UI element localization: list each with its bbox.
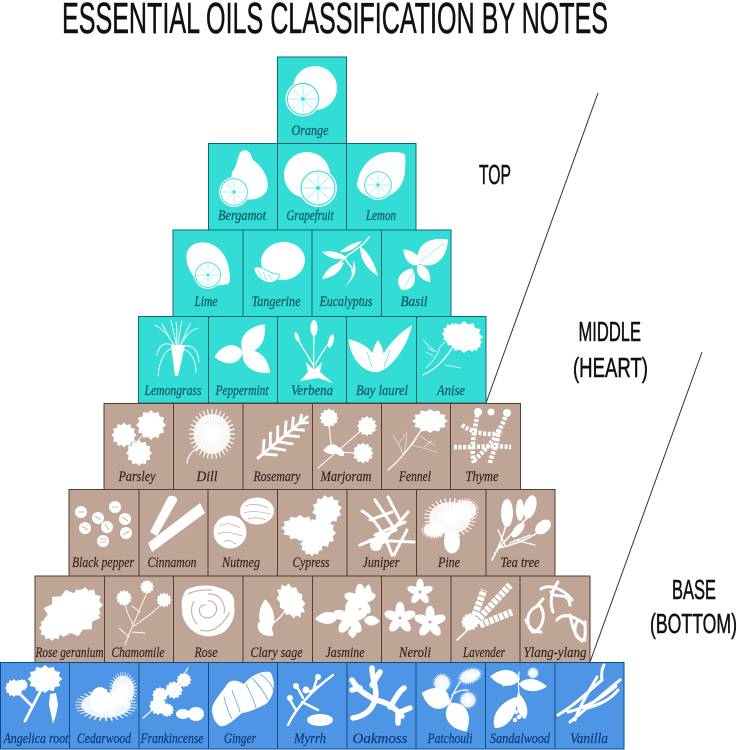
icon: parsley [112,410,166,466]
icon: basil [395,231,455,293]
cell: Lemongrass [138,316,208,403]
icon: black pepper [75,501,132,547]
label: Pine: Pine [437,555,460,571]
cell: Black pepper [69,490,139,576]
cell: Ylang-ylang [520,576,590,662]
icon: lavender [457,585,512,640]
icon: peppermint [213,318,276,380]
icon: juniper [360,497,414,555]
icon: lemon [357,152,405,200]
cell: Pine [416,490,486,576]
cell: Rose [174,576,243,662]
icon: clary sage [254,578,312,640]
icon: jasmine [315,584,380,638]
icon: oakmoss [352,668,410,723]
label: Nutmeg: Nutmeg [221,555,260,571]
label: Angelica root: Angelica root [3,731,69,747]
cell: Juniper [347,490,416,576]
icon: cypress [281,491,346,556]
heading: top: TOP [479,159,511,190]
icon: fennel [388,409,448,470]
label: Bay laurel: Bay laurel [356,383,408,399]
tier divider: middle to base [590,352,702,662]
icon: pine [421,498,479,554]
cell: Jasmine [312,576,382,662]
cell: Orange [278,57,346,144]
cell: Lemon [346,144,416,230]
cell: Cedarwood [70,662,139,749]
cell: Myrrh [278,662,347,749]
panel: top notes [138,57,486,403]
heading: middle (heart): MIDDLE [578,316,641,347]
panel: base notes [0,662,624,749]
icon: tea tree [492,494,554,560]
icon: ylang-ylang [526,582,585,641]
icon: grapefruit [284,152,337,207]
label: Patchouli: Patchouli [427,731,472,747]
label: Jasmine: Jasmine [326,645,365,661]
icon: sandalwood [488,667,547,733]
cell: Cinnamon [139,490,208,576]
icon: vanilla [558,665,620,722]
icon: verbena [293,320,335,383]
label: Lime: Lime [194,294,218,310]
icon: eucalyptus [322,237,378,292]
label: Parsley: Parsley [118,469,156,485]
cell: Peppermint [208,316,278,403]
icon: nutmeg [214,498,274,548]
cell: Clary sage [243,576,312,662]
heading: middle (heart): (HEART) [573,352,648,383]
label: Rose geranium: Rose geranium [35,645,104,661]
label: Tea tree: Tea tree [500,555,540,571]
cell: Rosemary [243,404,314,490]
label: Bergamot: Bergamot [218,208,267,224]
icon: dill [187,409,235,463]
label: Oakmoss: Oakmoss [352,731,408,747]
cell: Marjoram [312,404,382,490]
label: Rosemary: Rosemary [253,469,301,485]
cell: Lime [173,230,243,316]
cell: Sandalwood [486,662,555,749]
icon: bay laurel [342,321,417,378]
icon: rose [182,586,235,636]
cell: Verbena [278,316,346,403]
label: Peppermint: Peppermint [215,383,269,399]
label: Tangerine: Tangerine [252,294,301,310]
panel: middle notes [35,404,590,662]
cell: Bay laurel [342,316,417,403]
icon: ginger [212,672,274,726]
icon: marjoram [318,408,377,468]
cell: Tea tree [486,490,555,576]
icon: rose geranium [37,582,107,644]
icon: orange [286,66,337,116]
icon: angelica root [5,665,62,724]
icon: tangerine [254,239,307,283]
icon: lemongrass [155,320,199,376]
label: Grapefruit: Grapefruit [286,208,334,224]
icon: chamomile [116,580,172,645]
label: Frankincense: Frankincense [140,731,204,747]
cell: Grapefruit [278,144,346,230]
label: Sandalwood: Sandalwood [490,731,551,747]
icon: myrrh [287,674,333,726]
label: Neroli: Neroli [398,645,431,661]
cell: Ginger [208,662,278,749]
label: Vanilla: Vanilla [570,731,608,747]
label: Marjoram: Marjoram [320,469,372,485]
icon: cinnamon [148,496,205,552]
cell: Oakmoss [347,662,416,749]
label: Rose: Rose [194,645,218,661]
cell: Angelica root [0,662,70,749]
cell: Chamomile [104,576,174,662]
cell: Nutmeg [208,490,278,576]
cell: Patchouli [416,662,486,749]
label: Eucalyptus: Eucalyptus [319,294,373,310]
icon: cedarwood [75,672,137,721]
label: Lavender: Lavender [462,645,505,661]
label: Basil: Basil [400,294,428,310]
label: Verbena: Verbena [291,383,333,399]
cell: Eucalyptus [312,230,382,316]
tier divider: top to middle [486,93,598,403]
icon: thyme [454,408,511,463]
cell: Rose geranium [35,576,107,662]
label: Lemongrass: Lemongrass [144,383,202,399]
label: Ginger: Ginger [224,731,256,747]
label: Black pepper: Black pepper [72,555,134,571]
icon: patchouli [418,664,485,737]
cell: Bergamot [208,144,278,230]
label: Cinnamon: Cinnamon [148,555,196,571]
icon: rosemary [251,408,314,467]
label: Chamomile: Chamomile [112,645,165,661]
cell: Dill [174,404,243,490]
label: Anise: Anise [436,383,465,399]
label: Cypress: Cypress [292,555,330,571]
label: Myrrh: Myrrh [293,731,326,747]
label: Dill: Dill [196,469,218,485]
label: Lemon: Lemon [365,208,396,224]
label: Ylang-ylang: Ylang-ylang [524,645,586,661]
label: Fennel: Fennel [398,469,431,485]
icon: neroli [383,579,447,638]
cell: Tangerine [243,230,312,316]
cell: Vanilla [555,662,624,749]
cell: Lavender [451,576,520,662]
icon: frankincense [143,668,204,721]
icon: bergamot [219,150,268,207]
cell: Parsley [104,404,174,490]
cell: Cypress [278,490,347,576]
label: Thyme: Thyme [466,469,499,485]
icon: lime [186,242,230,289]
label: Cedarwood: Cedarwood [77,731,132,747]
icon: anise [423,321,483,375]
cell: Basil [382,230,455,316]
label: Orange: Orange [292,123,329,139]
cell: Neroli [382,576,451,662]
heading: base (bottom) [650,574,737,639]
cell: Thyme [450,404,520,490]
cell: Frankincense [139,662,208,749]
label: Juniper: Juniper [362,555,400,571]
cell: Fennel [382,404,450,490]
heading: middle (heart) [573,316,648,383]
cell: Anise [416,316,486,403]
label: Clary sage: Clary sage [250,645,303,661]
